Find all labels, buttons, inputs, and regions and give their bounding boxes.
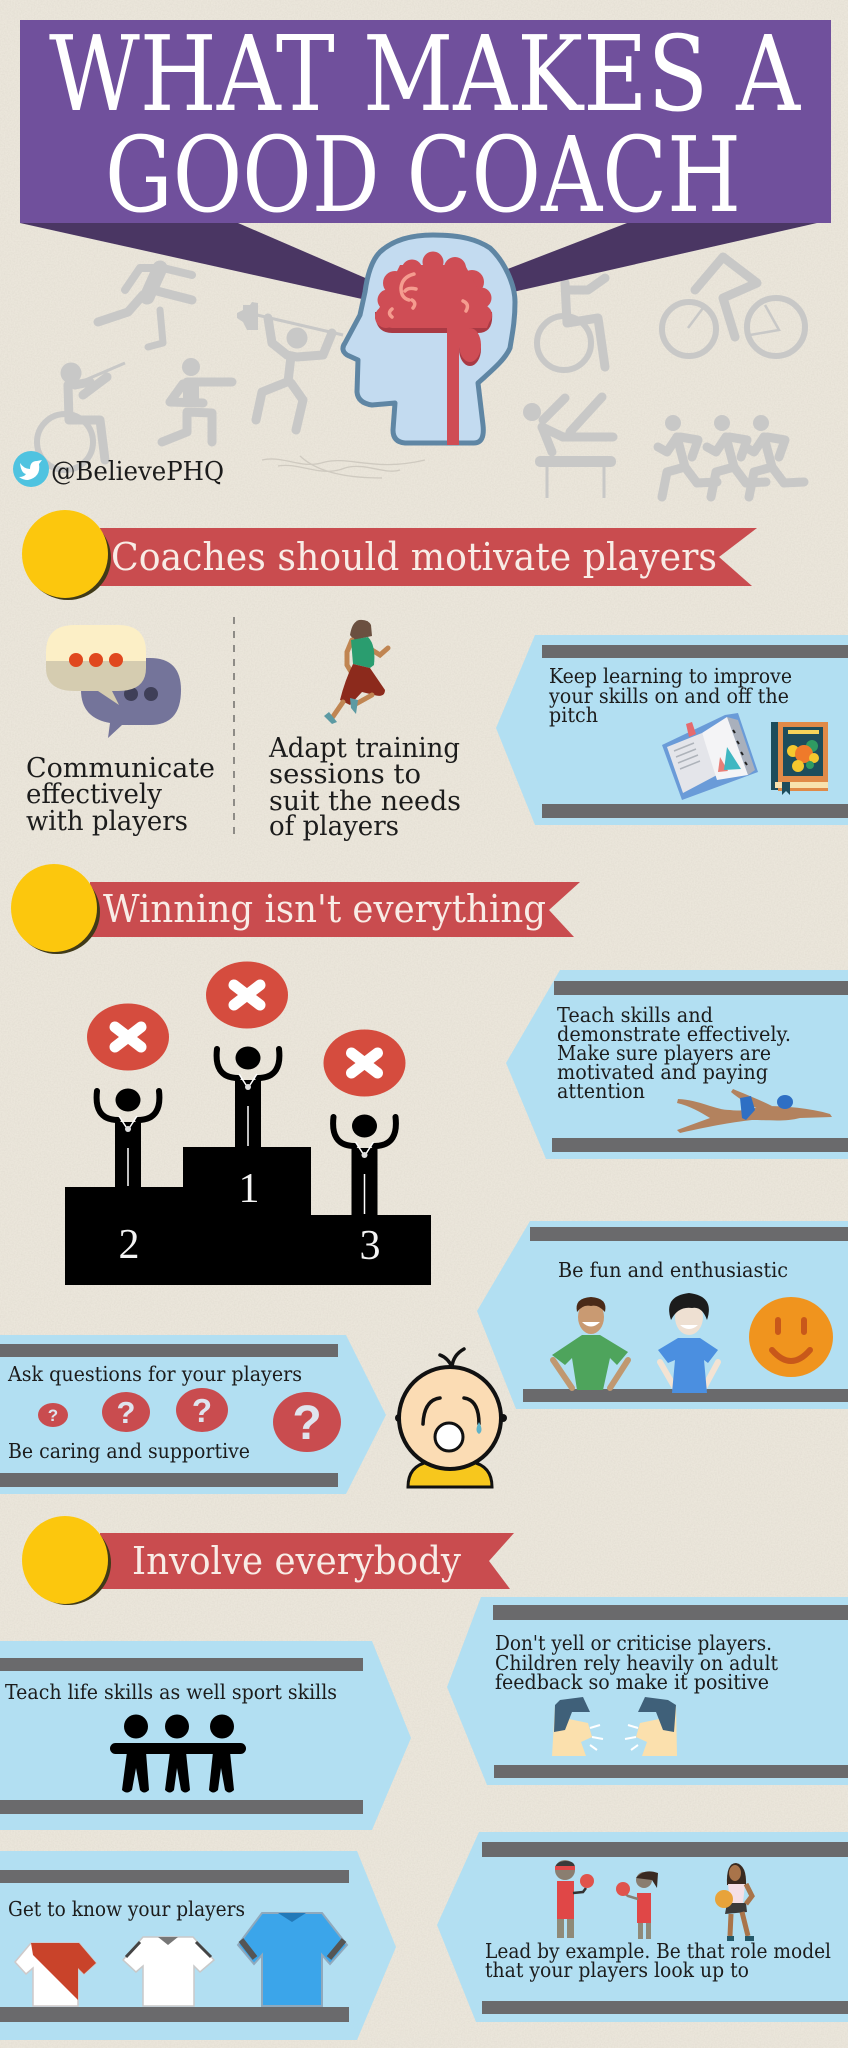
panel: keep learning xyxy=(496,635,848,825)
panel text xyxy=(495,1631,779,1694)
panel text: pitch xyxy=(549,703,598,727)
icon: basketball man xyxy=(555,1860,594,1938)
social handle xyxy=(13,451,224,487)
text: adapt training: Adapt training xyxy=(268,733,460,764)
panel text: Make sure players are xyxy=(557,1041,771,1065)
silhouette: hurdler xyxy=(98,268,192,347)
icon: speech bubbles xyxy=(46,625,181,738)
panel text xyxy=(557,1003,791,1103)
header: title banner xyxy=(20,13,831,236)
icon: twitter xyxy=(13,451,49,487)
text: be caring: Be caring and supportive xyxy=(8,1439,250,1463)
yellow circle xyxy=(11,864,100,954)
icon: open book xyxy=(662,713,758,800)
icon: woman with ball xyxy=(715,1863,754,1941)
icon: smiling man green shirt xyxy=(552,1297,628,1390)
text: communicate: Communicate xyxy=(26,753,215,784)
panel text: Don't yell or criticise players. xyxy=(495,1631,772,1655)
icon: basketball girl xyxy=(616,1871,658,1939)
divider xyxy=(233,617,235,840)
number 2: 2 xyxy=(118,1222,140,1268)
silhouette: weightlifter xyxy=(237,302,343,430)
silhouette: wheelchair athlete xyxy=(537,278,605,370)
panel text xyxy=(485,1939,831,1982)
panel text: your skills on and off the xyxy=(548,684,789,708)
icon: red sash shirt xyxy=(15,1943,96,2006)
ribbon xyxy=(90,882,580,937)
panel: be fun xyxy=(477,1221,848,1409)
heading text: Winning isn't everything xyxy=(103,887,546,931)
cross 1 xyxy=(206,962,288,1028)
icon: question mark small xyxy=(38,1403,68,1427)
panel: lead by example xyxy=(437,1832,848,2022)
handle text: @BelievePHQ xyxy=(51,457,224,487)
number 1: 1 xyxy=(238,1166,260,1212)
text: communicate xyxy=(26,753,215,837)
silhouette: cyclist xyxy=(662,257,805,356)
podium blocks xyxy=(65,1147,431,1285)
header: title banner tails xyxy=(20,223,817,299)
panel text: Children rely heavily on adult xyxy=(495,1651,779,1675)
silhouette: kneeling athlete xyxy=(162,358,232,442)
icon: female runner xyxy=(324,620,388,724)
panel: ask questions xyxy=(0,1335,386,1494)
brain xyxy=(375,252,492,445)
yellow circle xyxy=(22,510,111,600)
panel: teach skills xyxy=(506,970,848,1159)
panel text: Get to know your players xyxy=(8,1897,245,1921)
icon: crying baby xyxy=(395,1349,507,1487)
icon: blue shirt xyxy=(238,1913,347,2006)
text: adapt training xyxy=(268,733,461,842)
heading text: Involve everybody xyxy=(132,1539,461,1583)
number 3: 3 xyxy=(360,1223,380,1269)
icon: white shirt xyxy=(123,1937,214,2006)
yellow circle xyxy=(22,1516,111,1605)
winner figure 2 xyxy=(97,1088,159,1187)
icon: shouting faces xyxy=(552,1697,677,1756)
section 1 heading xyxy=(22,510,757,600)
text: ask questions: Ask questions for your players xyxy=(7,1362,302,1386)
panel text: Keep learning to improve xyxy=(549,664,792,688)
text: communicate: with players xyxy=(26,806,188,837)
panel text: attention xyxy=(557,1079,645,1103)
silhouette: pommel horse gymnast xyxy=(523,397,616,498)
heading text: Coaches should motivate players xyxy=(111,535,717,579)
panel text xyxy=(548,664,792,727)
silhouette: wheelchair shooter xyxy=(37,362,125,470)
icon: question mark large: ? xyxy=(192,1392,212,1429)
panel text: feedback so make it positive xyxy=(495,1670,769,1694)
text: adapt training: sessions to xyxy=(269,759,421,790)
ribbon xyxy=(100,528,757,586)
icon: closed book xyxy=(771,722,828,795)
winner figure 3 xyxy=(333,1114,396,1215)
panel: get to know xyxy=(0,1851,396,2040)
panel text: motivated and paying xyxy=(557,1060,768,1084)
text: communicate: effectively xyxy=(26,779,163,810)
panel text: Be fun and enthusiastic xyxy=(558,1258,788,1282)
section 2 heading xyxy=(11,864,580,954)
background sport silhouettes xyxy=(37,257,805,498)
panel text: that your players look up to xyxy=(485,1958,749,1982)
winner figure 1 xyxy=(217,1046,279,1147)
cross 3 xyxy=(324,1030,406,1096)
icon: question mark medium xyxy=(102,1392,150,1432)
text: adapt training: suit the needs xyxy=(269,786,461,817)
ribbon xyxy=(100,1533,514,1589)
panel text: Teach skills and xyxy=(557,1003,713,1027)
text: adapt training: of players xyxy=(269,811,399,842)
chart: podium xyxy=(65,962,431,1285)
icon: question mark extra large xyxy=(273,1392,341,1452)
section 3 heading xyxy=(22,1516,514,1605)
panel text: Teach life skills as well sport skills xyxy=(5,1680,337,1704)
silhouette: three runners xyxy=(658,415,804,497)
panel: teach life skills xyxy=(0,1641,411,1830)
icon: smiling man blue shirt xyxy=(658,1293,718,1393)
panel: don't yell xyxy=(447,1597,848,1785)
icon: smiley xyxy=(749,1297,833,1377)
icon: swimmer xyxy=(677,1089,832,1133)
icon: question mark large xyxy=(176,1388,228,1432)
icon: three people xyxy=(110,1714,246,1792)
cross 2 xyxy=(87,1004,169,1070)
icon: question mark medium: ? xyxy=(117,1395,135,1430)
icon: question mark extra large: ? xyxy=(292,1397,322,1450)
icon: head with brain xyxy=(343,235,515,445)
silhouette: swimmer ripples xyxy=(262,456,425,478)
panel text: demonstrate effectively. xyxy=(557,1022,791,1046)
icon: question mark small: ? xyxy=(48,1406,58,1425)
